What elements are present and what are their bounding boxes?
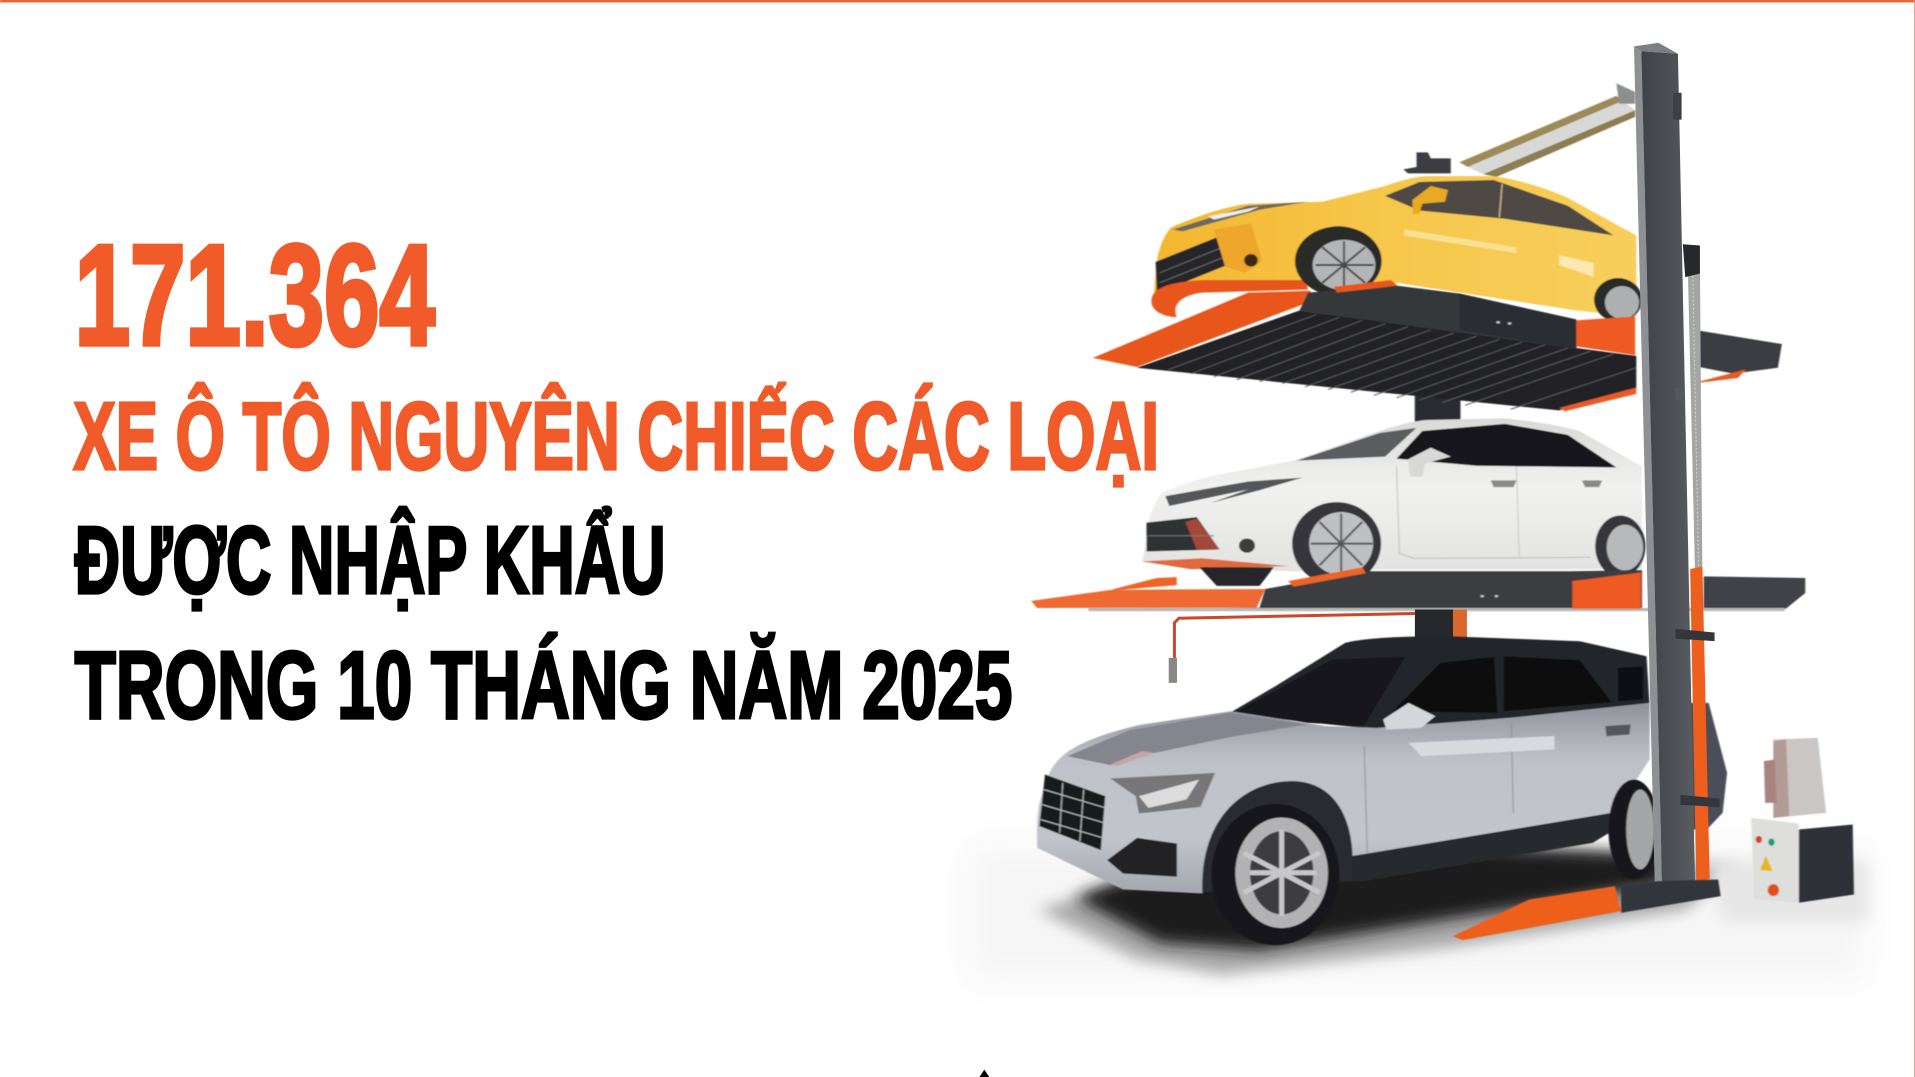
yellow car rear wheel	[1594, 278, 1642, 322]
ground ramp	[1453, 886, 1621, 940]
yellow car	[1151, 176, 1642, 322]
lift base	[1621, 879, 1721, 913]
white car body	[1143, 418, 1642, 571]
orange subheading: XE Ô TÔ NGUYÊN CHIẾC CÁC LOẠI	[73, 384, 1159, 490]
yellow car front wheel	[1295, 226, 1382, 296]
SUV door detail	[1364, 723, 1631, 853]
parking lift and upper cars	[1031, 83, 1805, 611]
SUV mirror	[1383, 703, 1435, 730]
chain rail	[1688, 264, 1702, 574]
SUV body	[1037, 703, 1650, 893]
SUV hood	[1067, 713, 1307, 765]
headline	[73, 216, 1159, 739]
yellow car windows	[1385, 180, 1613, 235]
control box on post	[1683, 244, 1700, 277]
upper platform orange bracket	[1576, 316, 1635, 355]
white car under wheel	[1200, 567, 1274, 586]
SUV headlight	[1110, 773, 1215, 813]
overhead tube	[1403, 83, 1635, 177]
lift base and hydraulic pump	[1453, 738, 1854, 940]
SUV front intake	[1107, 838, 1177, 877]
white car door lines	[1397, 467, 1591, 558]
yellow car mirror	[1413, 186, 1448, 214]
hydraulic pump	[1751, 738, 1854, 903]
SUV front wheel	[1202, 781, 1353, 945]
big number: 171.364	[75, 216, 435, 375]
orange post strip	[1690, 567, 1710, 882]
right edge line	[1913, 0, 1915, 1077]
upper platform side beam	[1299, 280, 1576, 349]
lower column and hanging control	[1169, 610, 1467, 683]
black line two: TRONG 10 THÁNG NĂM 2025	[75, 633, 1012, 739]
SUV windows	[1237, 656, 1643, 726]
yellow car body	[1154, 176, 1636, 316]
top orange rule	[0, 0, 1915, 2]
SUV rear wheel	[1608, 780, 1659, 879]
SUV grille	[1039, 775, 1105, 850]
yellow car headlight	[1173, 202, 1308, 231]
post clamps	[1673, 93, 1719, 807]
white car windows	[1397, 424, 1616, 467]
white car front wheel	[1292, 502, 1381, 585]
white car grille	[1147, 517, 1220, 551]
upper platform underside	[1137, 310, 1636, 411]
center column upper	[1415, 395, 1460, 424]
white car rear wheel	[1595, 516, 1645, 577]
upper platform ramp	[1093, 291, 1311, 367]
yellow car front lip	[1151, 280, 1308, 317]
lower platform ramp	[1031, 567, 1366, 608]
lower platform beam	[1088, 570, 1805, 611]
upper platform right beam	[1699, 331, 1782, 383]
white car mirror	[1408, 448, 1451, 476]
lower platform orange bracket	[1572, 572, 1641, 609]
pump motor	[1773, 738, 1826, 818]
white car lip	[1143, 558, 1288, 569]
black line one: ĐƯỢC NHẬP KHẨU	[75, 507, 666, 614]
silver SUV	[1037, 636, 1727, 945]
floor shadow	[965, 843, 1868, 983]
clipped diacritic at bottom edge	[979, 1070, 989, 1077]
SUV rear end behind post	[1681, 703, 1727, 829]
SUV sill	[1348, 813, 1615, 881]
yellow car grille	[1156, 237, 1225, 293]
pump tank	[1799, 824, 1854, 903]
SUV roof and glass surround	[1231, 636, 1650, 730]
white car	[1143, 418, 1645, 586]
pump control box	[1751, 818, 1799, 903]
white car headlight	[1165, 478, 1302, 506]
lift post	[1634, 43, 1719, 883]
